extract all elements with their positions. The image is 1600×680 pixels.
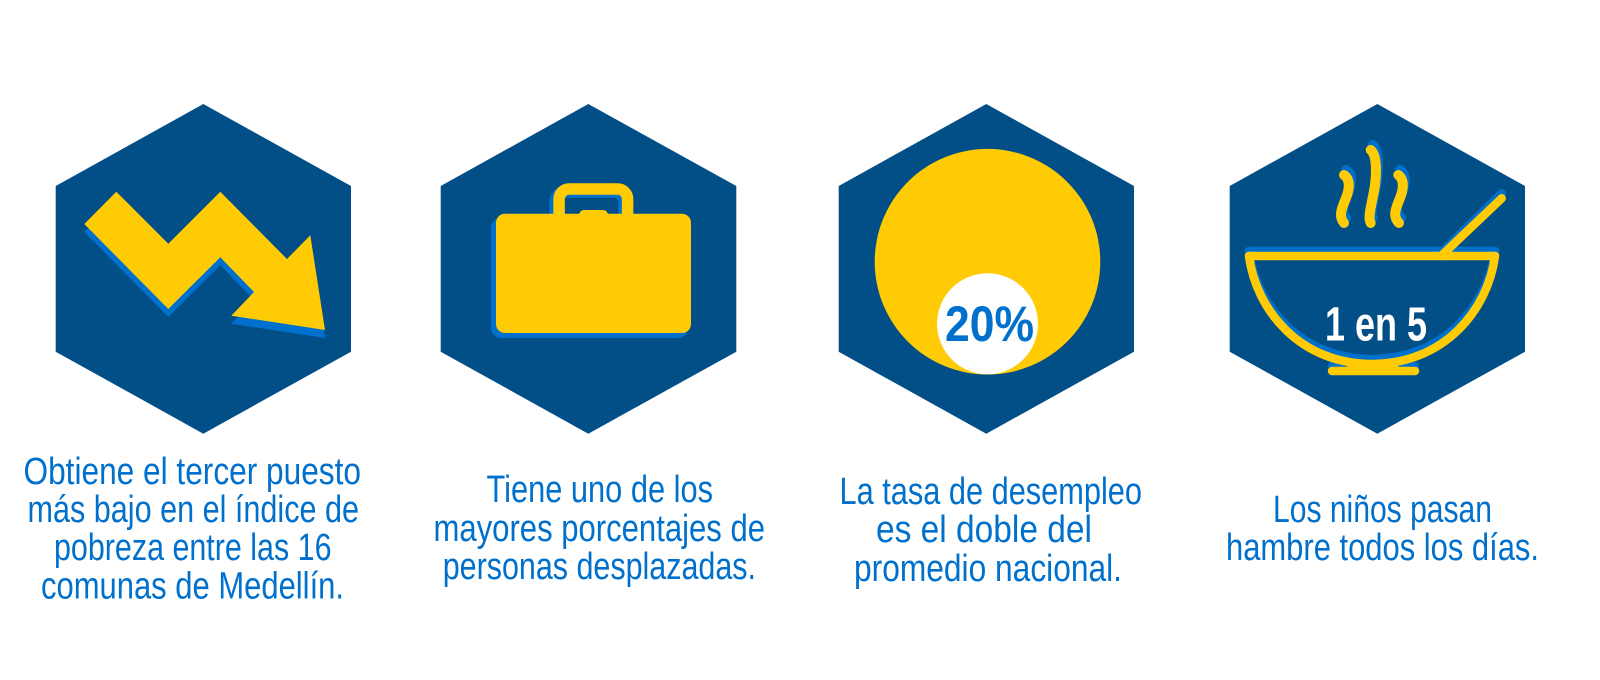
caption 2: personas desplazadas. bbox=[443, 546, 756, 588]
caption 1 bbox=[24, 451, 361, 608]
icon: briefcase bbox=[491, 189, 691, 338]
hexagon 2 bbox=[441, 104, 736, 434]
icon: soup bowl bbox=[1249, 145, 1502, 371]
caption 3: es el doble del bbox=[876, 509, 1092, 551]
panel: child hunger bbox=[1226, 104, 1539, 569]
caption 3 bbox=[840, 471, 1142, 590]
panel: poverty ranking bbox=[24, 104, 361, 608]
caption 3: La tasa de desempleo bbox=[840, 471, 1142, 513]
caption 2: Tiene uno de los bbox=[486, 469, 713, 511]
caption 4: hambre todos los días. bbox=[1226, 527, 1539, 569]
stat: 1 en 5: 1 en 5 bbox=[1325, 298, 1427, 352]
panel: displaced people bbox=[434, 104, 765, 588]
caption 4 bbox=[1226, 489, 1539, 569]
hexagon 4 bbox=[1230, 104, 1525, 434]
caption 3: promedio nacional. bbox=[854, 548, 1122, 590]
hexagon 3 bbox=[839, 104, 1134, 434]
caption 1: pobreza entre las 16 bbox=[54, 527, 332, 569]
caption 2: mayores porcentajes de bbox=[434, 508, 765, 550]
caption 4: Los niños pasan bbox=[1273, 489, 1492, 531]
caption 2 bbox=[434, 469, 765, 588]
panel: unemployment bbox=[839, 104, 1142, 590]
icon: falling zigzag arrow bbox=[84, 192, 325, 338]
hexagon 1 bbox=[56, 104, 351, 434]
caption 1: Obtiene el tercer puesto bbox=[24, 451, 361, 493]
caption 1: más bajo en el índice de bbox=[28, 489, 359, 531]
chart: 20 percent circle bbox=[875, 149, 1100, 374]
caption 1: comunas de Medellín. bbox=[41, 566, 344, 608]
chart: 20 percent circle: 20% bbox=[945, 296, 1034, 352]
